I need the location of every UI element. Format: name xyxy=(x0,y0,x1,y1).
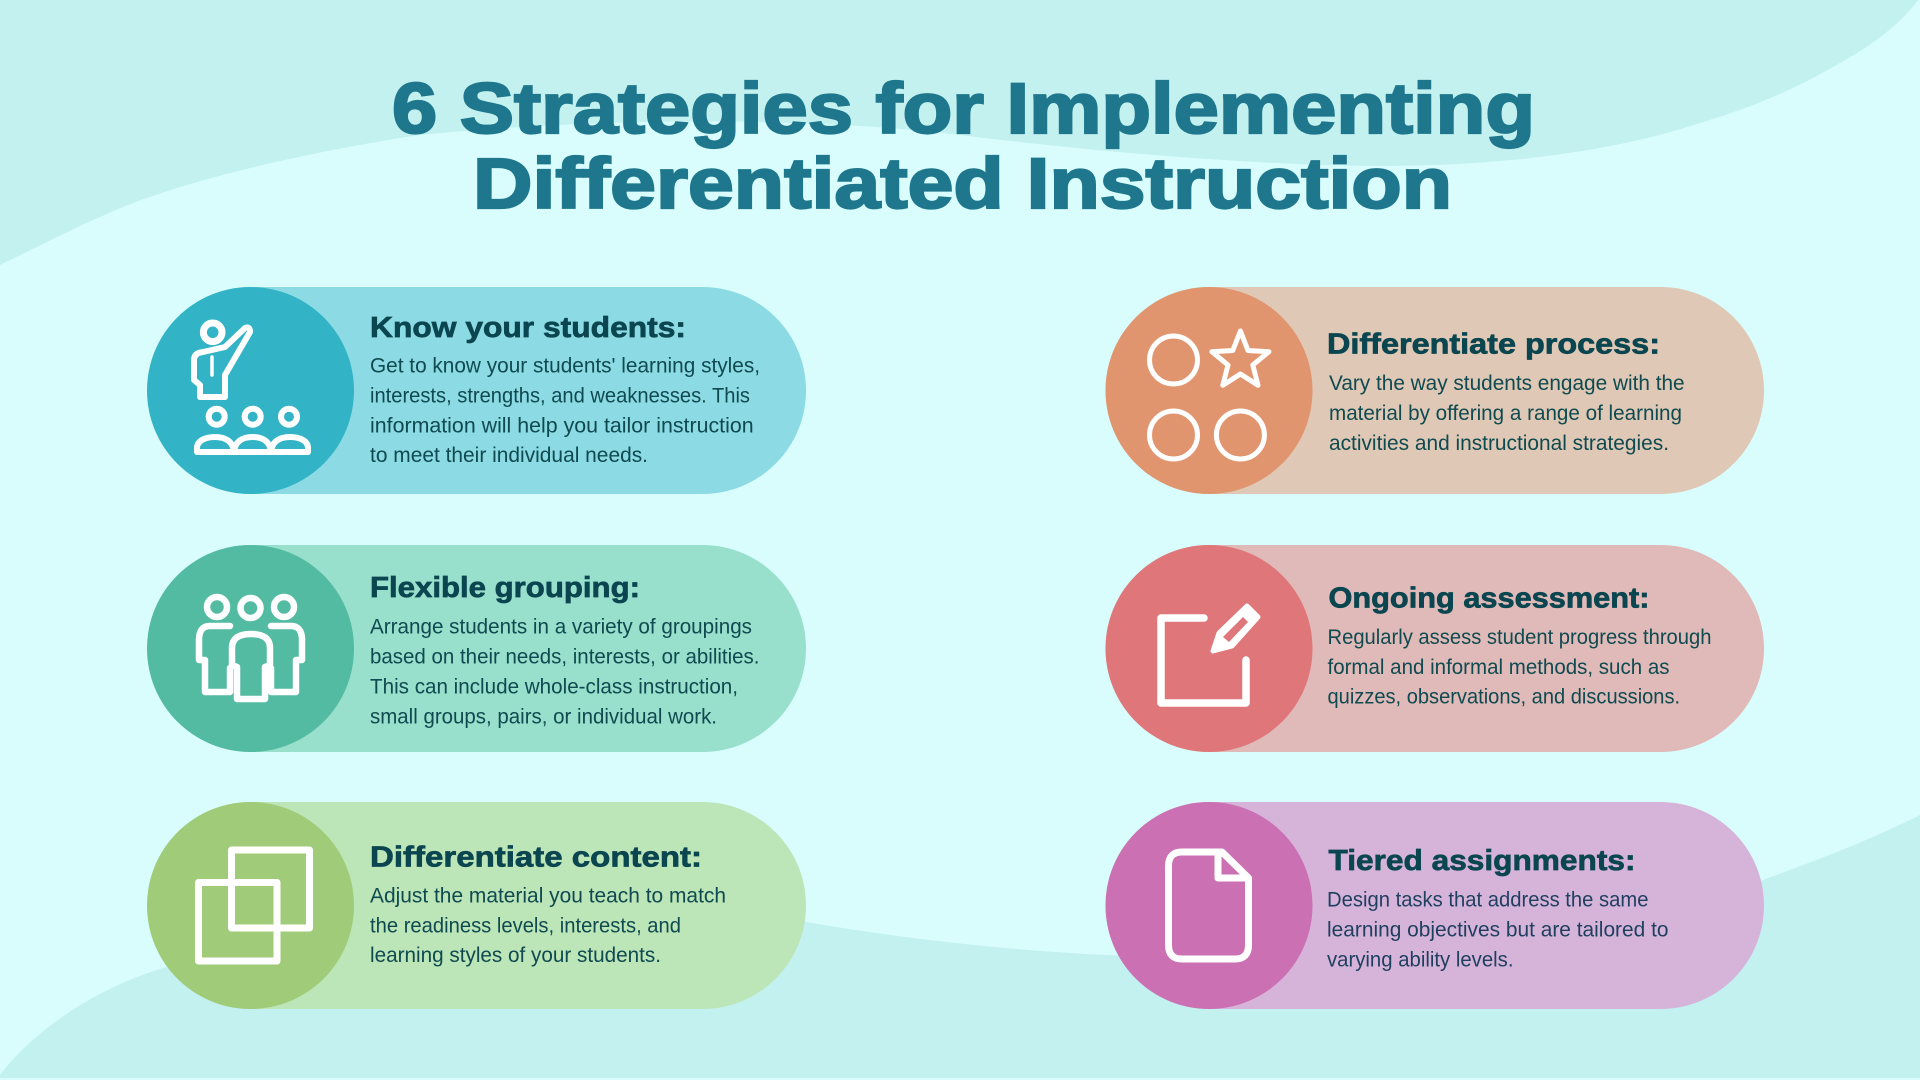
text block: material by offering a range of learning xyxy=(1329,402,1682,425)
text block xyxy=(1328,626,1712,708)
panel: flexible grouping xyxy=(147,545,806,752)
heading: Flexible grouping: xyxy=(370,572,640,604)
panel: ongoing assessment xyxy=(1106,545,1764,752)
text block: Arrange students in a variety of groupings xyxy=(370,616,752,638)
panel: tiered assignments xyxy=(1106,802,1764,1009)
text block: formal and informal methods, such as xyxy=(1328,656,1670,679)
heading: Differentiate content: xyxy=(370,842,702,874)
text block xyxy=(370,616,760,728)
icon: note and pencil xyxy=(1161,606,1258,703)
heading: Ongoing assessment: xyxy=(1328,582,1650,614)
text block xyxy=(1327,889,1668,972)
text block: the readiness levels, interests, and xyxy=(370,914,681,938)
text block: small groups, pairs, or individual work. xyxy=(370,706,717,728)
background wave: top xyxy=(0,0,1918,265)
text block: Design tasks that address the same xyxy=(1327,889,1648,912)
text block: interests, strengths, and weaknesses. This xyxy=(370,384,750,408)
icon: shapes and star xyxy=(1150,331,1269,459)
title: 6 Strategies for Implementing xyxy=(392,70,1535,149)
text block: quizzes, observations, and discussions. xyxy=(1328,685,1680,708)
icon: overlapping squares xyxy=(198,850,310,961)
heading: Differentiate process: xyxy=(1327,328,1660,360)
panel: know your students xyxy=(147,287,806,494)
text block xyxy=(370,884,726,967)
icon: document xyxy=(1168,852,1248,959)
text block: Regularly assess student progress through xyxy=(1328,626,1712,649)
panel: differentiate content xyxy=(147,802,806,1009)
text block: Adjust the material you teach to match xyxy=(370,884,726,908)
title xyxy=(392,70,1535,224)
text block xyxy=(1329,372,1685,455)
icon: teacher and students xyxy=(194,323,308,452)
text block: learning objectives but are tailored to xyxy=(1327,919,1668,942)
icon: group of people xyxy=(199,597,302,699)
background wave: bottom xyxy=(0,815,1920,1078)
text block: activities and instructional strategies. xyxy=(1329,432,1669,455)
text block: information will help you tailor instruction xyxy=(370,414,754,438)
text block: based on their needs, interests, or abilities. xyxy=(370,646,760,668)
text block: varying ability levels. xyxy=(1327,949,1514,972)
text block: learning styles of your students. xyxy=(370,944,661,967)
heading: Tiered assignments: xyxy=(1328,845,1636,877)
text block xyxy=(370,354,760,467)
title: Differentiated Instruction xyxy=(473,145,1452,224)
text block: to meet their individual needs. xyxy=(370,444,648,467)
text block: Get to know your students' learning styles, xyxy=(370,354,760,378)
text block: Vary the way students engage with the xyxy=(1329,372,1685,395)
heading: Know your students: xyxy=(370,312,686,344)
text block: This can include whole-class instruction, xyxy=(370,676,738,698)
panel: differentiate process xyxy=(1106,287,1764,494)
